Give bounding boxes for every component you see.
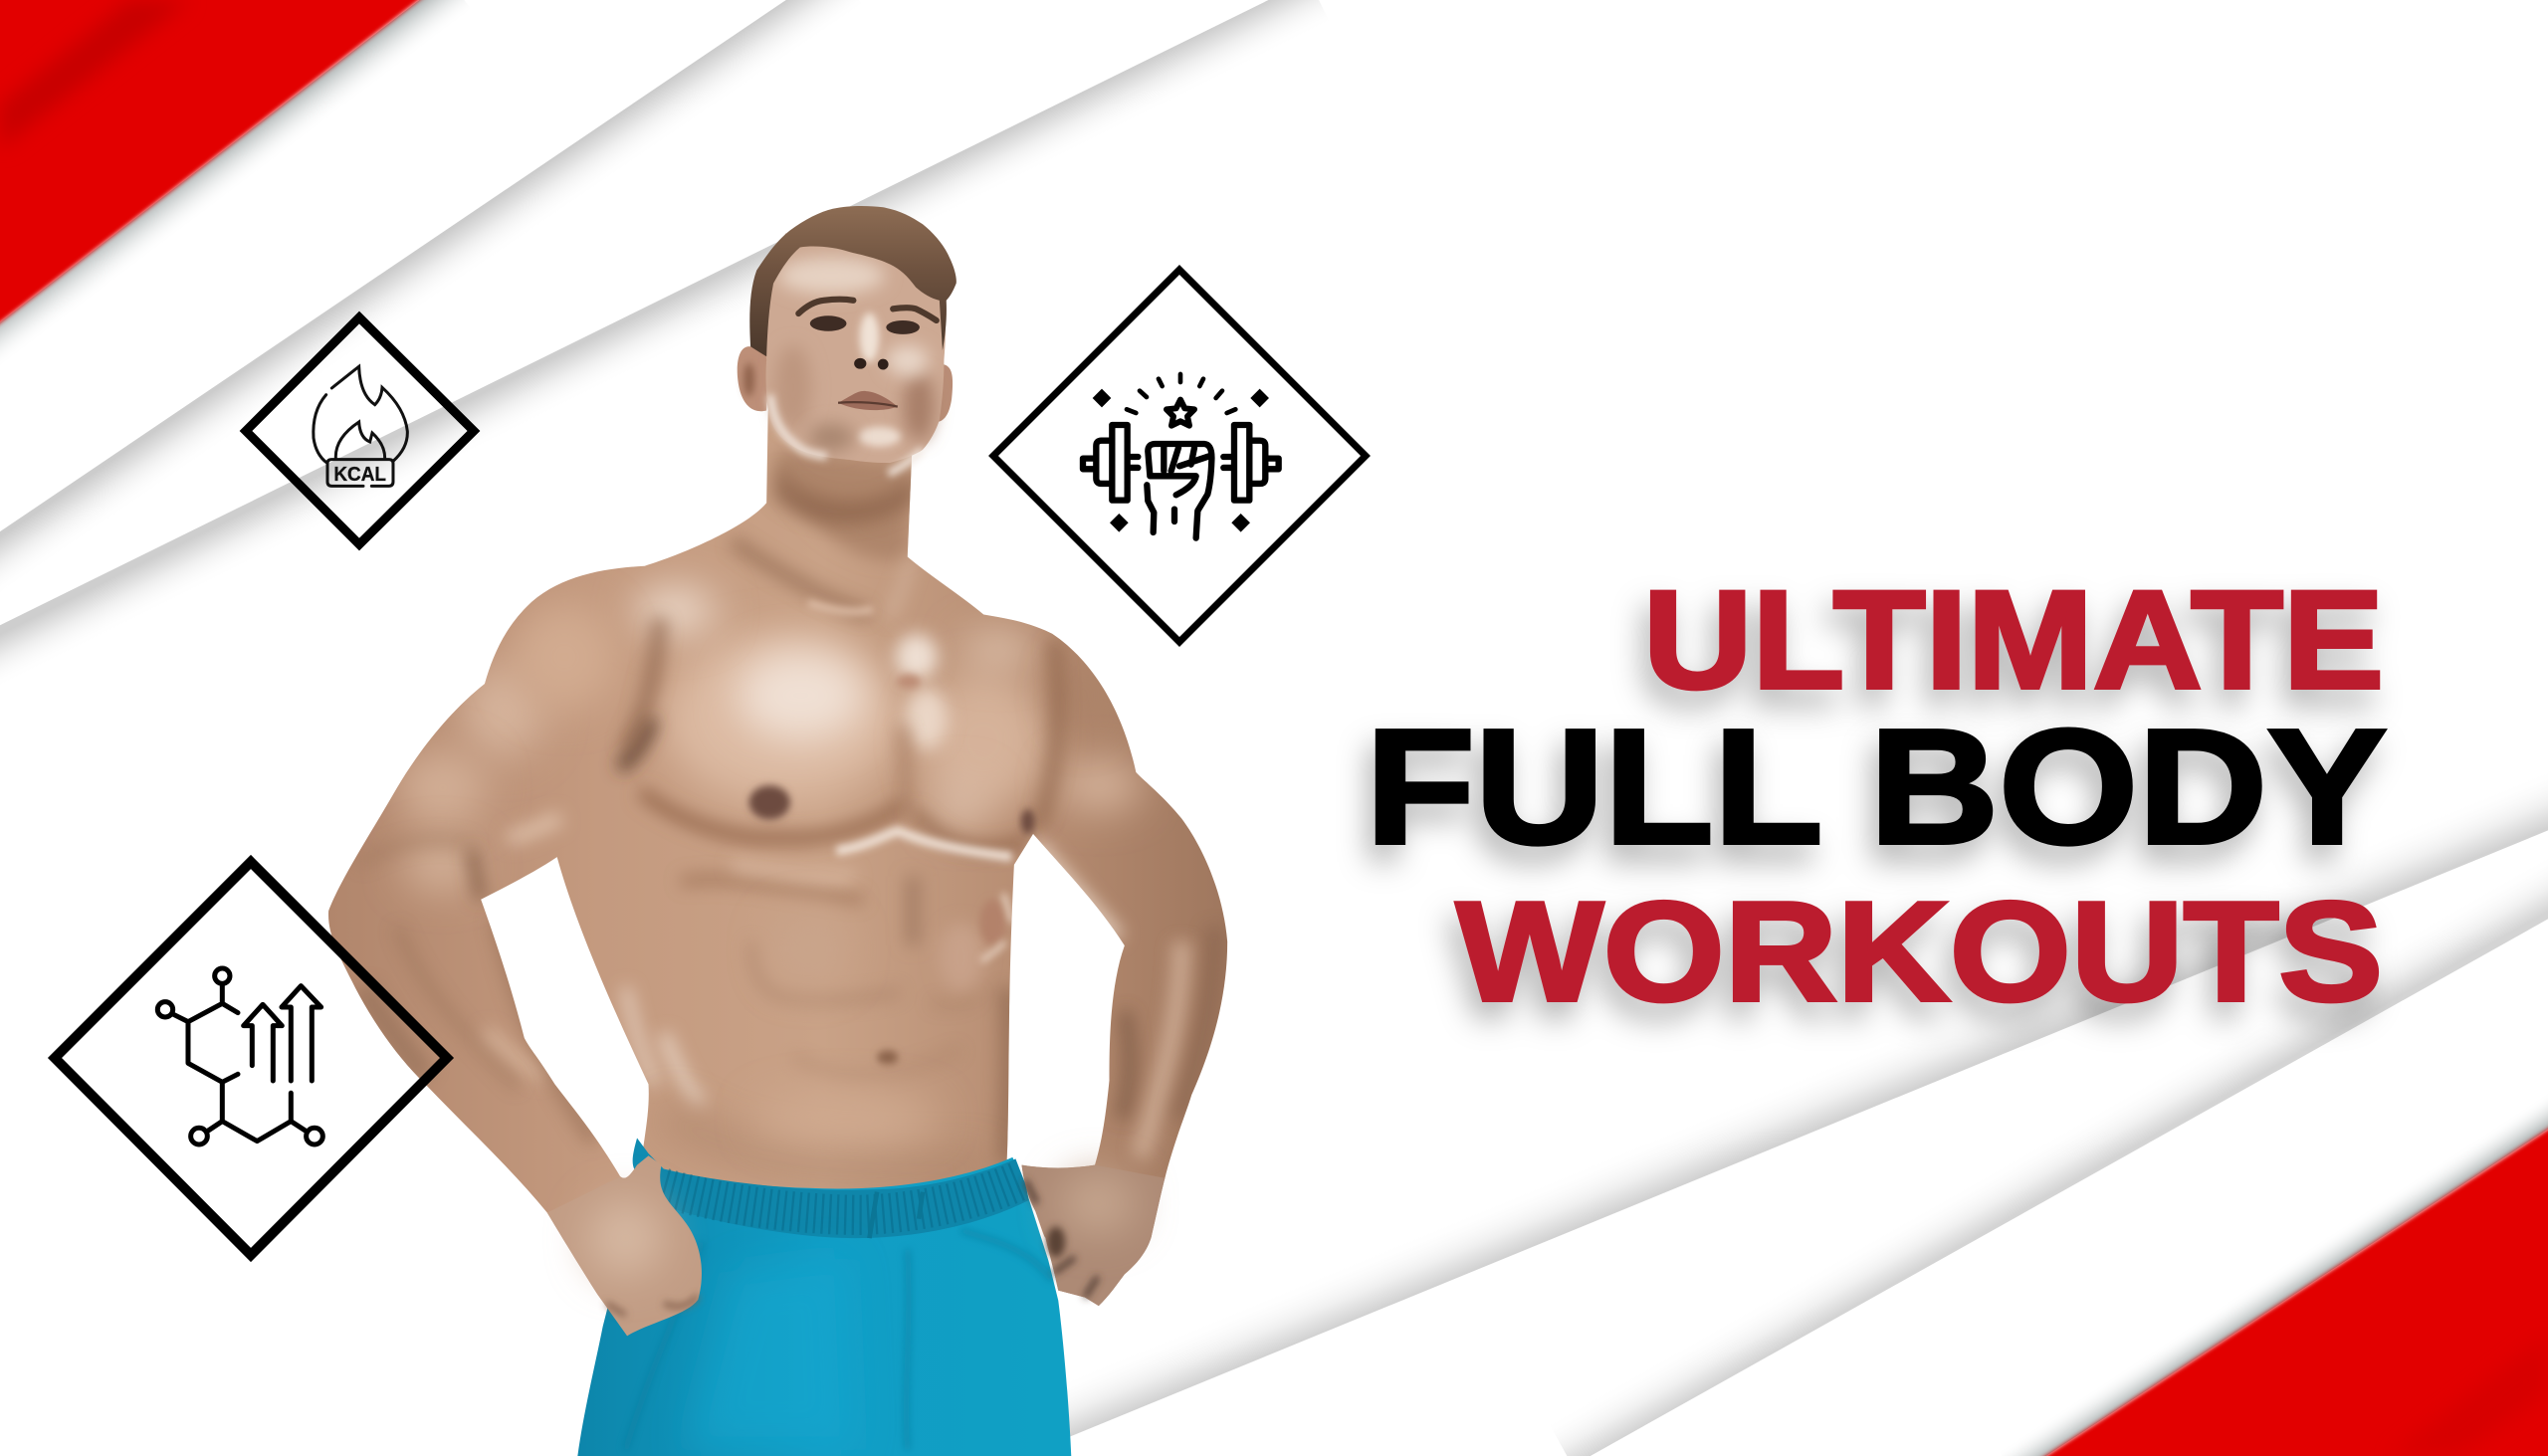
- fabric fold: lower right: [1539, 836, 2548, 1456]
- red corner: top left: [0, 0, 432, 330]
- fabric fold: upper left: [0, 0, 875, 623]
- body: [328, 410, 1227, 1336]
- eyes and brows: [798, 300, 937, 320]
- dumbbell right: [1223, 425, 1279, 501]
- hair: [749, 206, 956, 356]
- right hand on hip: [1022, 1165, 1165, 1306]
- abs: [904, 876, 922, 945]
- title line: ULTIMATE: ULTIMATE: [1643, 561, 2384, 718]
- ears: [738, 346, 770, 411]
- red corner shadow: bottom right: [1996, 1080, 2548, 1456]
- arrow: short: [244, 1004, 282, 1081]
- dark creases: [619, 719, 652, 768]
- under-pec lines: [641, 791, 904, 838]
- title line: FULL BODY: FULL BODY: [1366, 696, 2387, 878]
- icon: flame with KCAL label: [314, 366, 407, 486]
- fabric fold: lower middle: [995, 740, 2548, 1455]
- dumbbell left: [1083, 425, 1138, 501]
- waistband: [656, 1158, 1028, 1238]
- fabric fold: upper middle: [0, 0, 1336, 699]
- jaw highlight: [770, 395, 923, 474]
- icon: molecule with arrows diamond: [55, 862, 447, 1255]
- icon: fist and dumbbell diamond: [993, 270, 1366, 642]
- star: [1167, 400, 1194, 426]
- rays: [1127, 374, 1235, 413]
- right forearm: [1140, 941, 1181, 1157]
- icon: molecule and up arrows: [157, 968, 322, 1144]
- man figure: [328, 206, 1227, 1456]
- arrow: tall: [282, 986, 321, 1081]
- red corner: bottom right: [2030, 1123, 2548, 1456]
- title: [1366, 561, 2387, 1031]
- head: [738, 206, 956, 474]
- neck: [774, 449, 912, 560]
- left hand in pocket: [547, 1155, 702, 1336]
- muscle shading: [359, 449, 1214, 1169]
- icon: fist gripping dumbbell: [1083, 374, 1279, 538]
- fist: [1147, 444, 1211, 538]
- sparkles: [1093, 389, 1269, 532]
- title line: WORKOUTS: WORKOUTS: [1456, 873, 2383, 1031]
- lips: [838, 391, 898, 410]
- icon: kcal flame diamond: [246, 317, 474, 544]
- face: [764, 234, 946, 463]
- arm highlights: [462, 665, 545, 757]
- nose: [854, 358, 889, 369]
- shorts: [577, 1139, 1071, 1456]
- chest highlights: [664, 634, 900, 803]
- red corner shadow: top left: [0, 0, 478, 385]
- KCAL label: KCAL: [333, 463, 386, 486]
